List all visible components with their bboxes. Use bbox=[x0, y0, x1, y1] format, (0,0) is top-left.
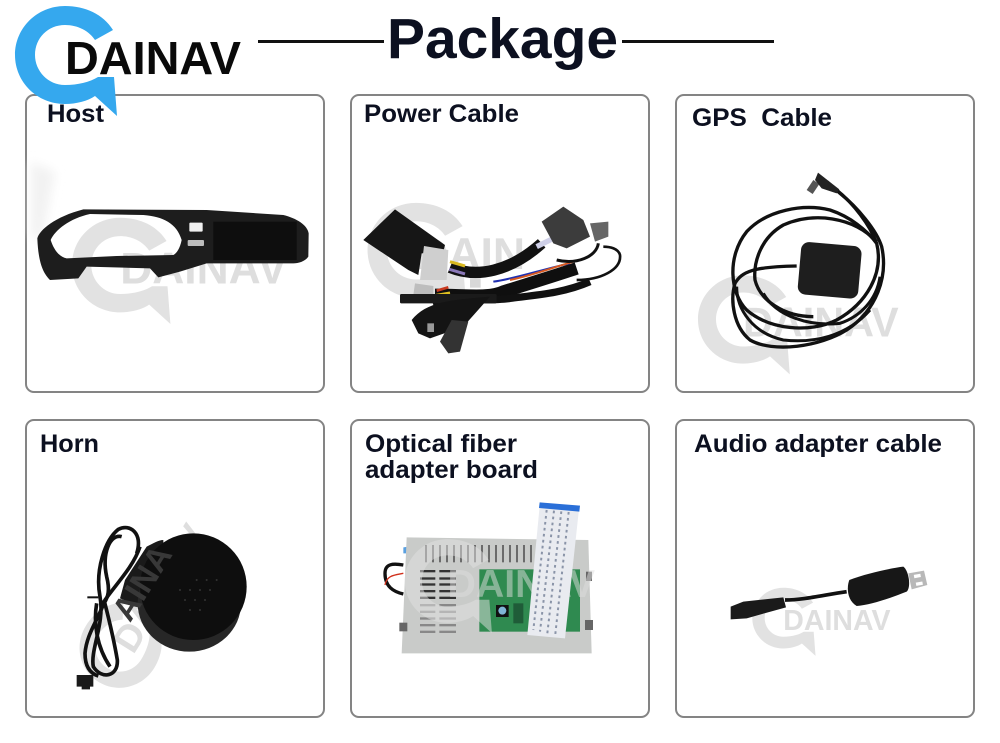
watermark: gps cable: DAINAV bbox=[743, 300, 899, 346]
product: adapter board bbox=[385, 502, 595, 653]
watermark: horn bbox=[64, 505, 238, 708]
watermark: host: DAINAV bbox=[120, 244, 287, 293]
product: dashboard trim frame bbox=[37, 209, 309, 280]
heading: optical fiber adapter board: adapter board bbox=[365, 456, 538, 484]
heading: optical fiber adapter board bbox=[365, 430, 538, 484]
heading: power cable: Power Cable bbox=[364, 100, 519, 128]
panel: gps cable bbox=[676, 95, 974, 392]
watermark: host bbox=[72, 218, 287, 324]
product: round speaker bbox=[77, 528, 247, 689]
product: usb audio adapter bbox=[731, 567, 927, 619]
panel: horn bbox=[26, 420, 324, 717]
heading: horn: Horn bbox=[40, 430, 99, 458]
heading: optical fiber adapter board: Optical fiber bbox=[365, 430, 517, 458]
watermark: gps cable bbox=[698, 275, 899, 374]
panel: power cable bbox=[351, 95, 649, 392]
ribbon cable bbox=[527, 502, 580, 638]
product: gps antenna bbox=[733, 173, 883, 347]
title: Package bbox=[387, 7, 618, 71]
heading: audio adapter cable: Audio adapter cable bbox=[694, 430, 942, 458]
panel: audio adapter cable bbox=[676, 420, 974, 717]
logo: DAINAV: DAINAV bbox=[65, 32, 241, 84]
panel: host bbox=[26, 95, 324, 392]
heading: host: Host bbox=[47, 100, 105, 128]
logo: DAINAV bbox=[15, 6, 241, 116]
watermark: power cable: DAIN bbox=[416, 230, 525, 279]
watermark: audio adapter bbox=[752, 588, 891, 656]
watermark: power cable bbox=[368, 203, 525, 310]
watermark: optical board: DAINAV bbox=[448, 562, 595, 606]
watermark: audio adapter: DAINAV bbox=[783, 605, 891, 637]
panel: optical fiber adapter board bbox=[351, 420, 649, 717]
product: wiring harness bbox=[363, 207, 620, 353]
watermark: optical board bbox=[405, 539, 595, 633]
heading: gps cable: GPS Cable bbox=[692, 104, 832, 132]
product: round speaker: AINA bbox=[105, 539, 180, 628]
watermark: horn: DAINAV bbox=[104, 517, 215, 659]
title bbox=[258, 7, 774, 71]
